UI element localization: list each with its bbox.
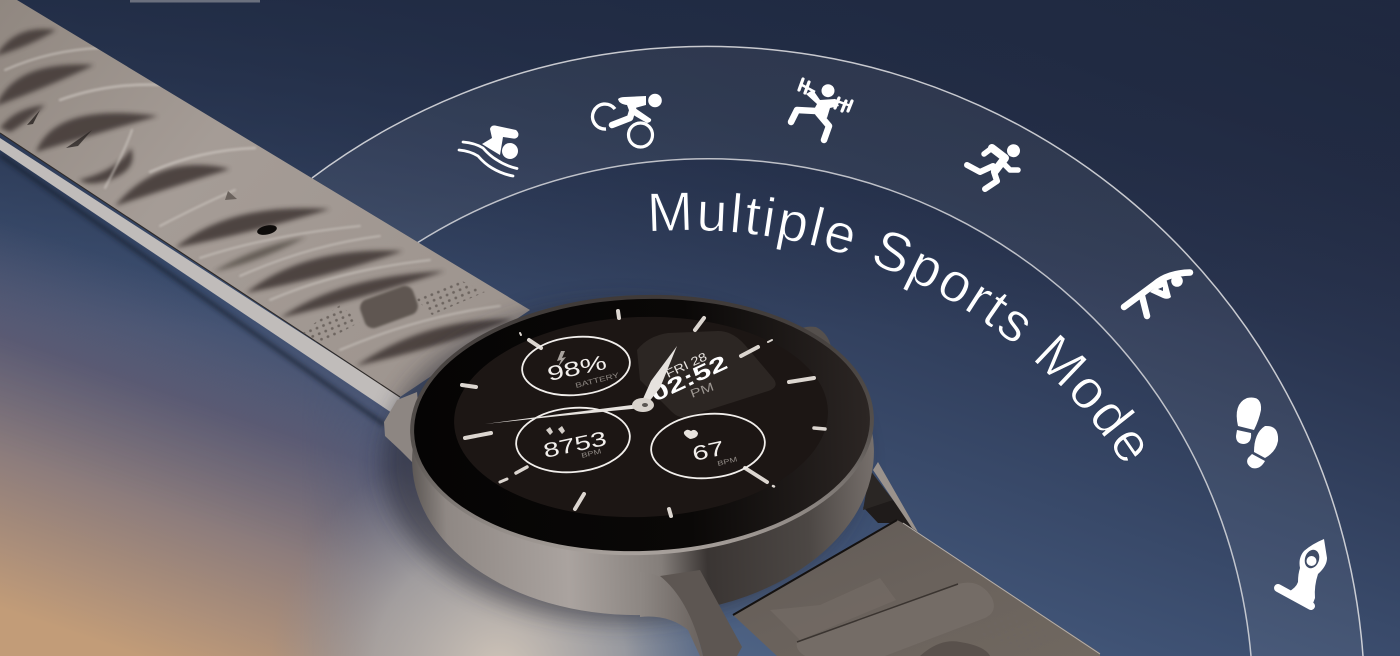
steps complication: 8753 <box>541 427 609 463</box>
icon: swimming <box>459 125 518 176</box>
digital time: FRI 28 <box>663 350 709 380</box>
watch strap: upper <box>0 0 530 425</box>
icon: footprints <box>1236 398 1278 468</box>
left lug <box>384 392 425 475</box>
strap highlights <box>5 48 500 350</box>
icon: yoga <box>1278 539 1327 606</box>
icon: weightlifting <box>791 79 852 140</box>
battery complication: 98% <box>545 351 609 386</box>
crown <box>796 327 832 352</box>
strap rounded pad <box>359 285 419 330</box>
outer arc <box>312 46 1363 656</box>
steps complication <box>513 403 633 477</box>
watch shadow <box>382 302 862 622</box>
watch case <box>406 287 879 623</box>
clock hands <box>485 346 677 424</box>
digital time: PM <box>688 379 716 400</box>
icon: stretching <box>1124 272 1190 316</box>
right lug frame <box>863 462 918 532</box>
battery complication: BATTERY <box>574 371 620 390</box>
icon: cycling <box>593 94 662 147</box>
battery complication <box>520 332 632 400</box>
heart rate complication: 67 <box>690 437 726 466</box>
strap dotted texture <box>302 280 485 344</box>
dial <box>451 311 831 523</box>
heart rate complication <box>648 409 768 483</box>
heart rate complication: BPM <box>717 455 738 468</box>
steps complication: BPM <box>581 447 602 460</box>
lower lug <box>640 570 742 656</box>
hour ticks <box>462 311 825 516</box>
strap speckles <box>27 110 278 236</box>
time widget <box>637 331 776 417</box>
inner arc <box>417 159 1251 656</box>
watch strap: lower <box>733 520 1100 656</box>
heading: Multiple Sports Mode: Multiple Sports Mode <box>651 192 1144 462</box>
strap raised bar <box>797 583 994 656</box>
icon: running <box>967 144 1020 189</box>
watch face <box>410 291 874 559</box>
digital time: 02:52 <box>647 351 731 406</box>
strap ridges <box>0 29 513 366</box>
sports band between arcs <box>312 46 1363 656</box>
